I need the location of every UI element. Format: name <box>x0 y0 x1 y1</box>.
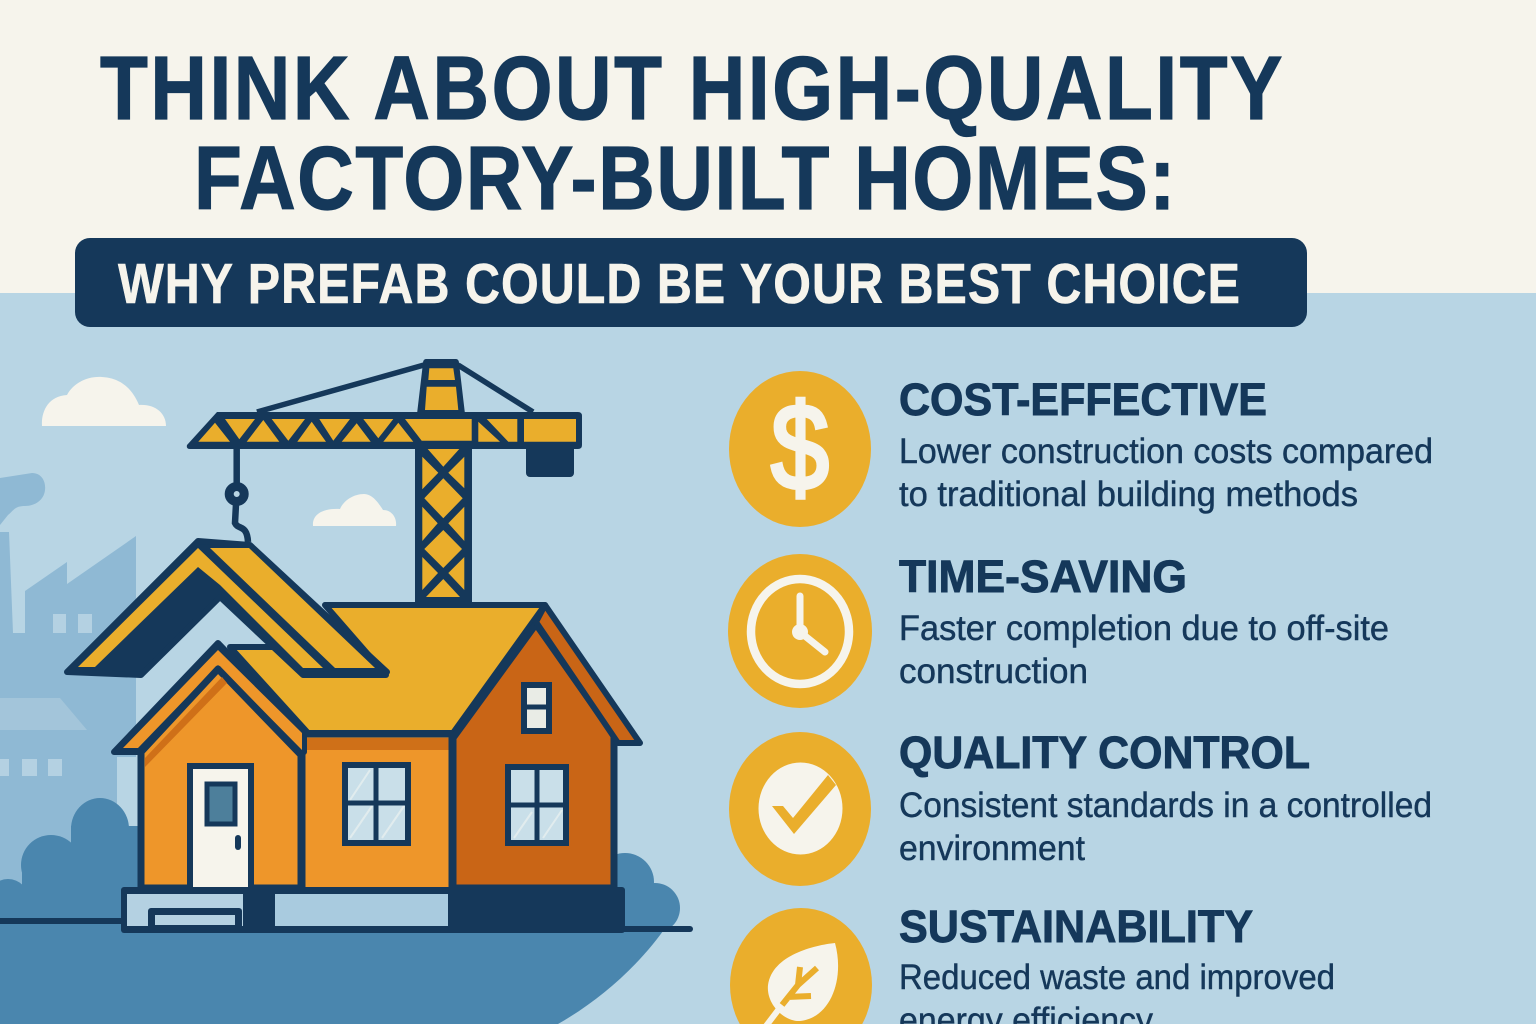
crane cables <box>257 365 533 412</box>
time-saving text: TIME-SAVING <box>899 551 1187 602</box>
crane top cap <box>417 359 465 414</box>
icon: dollar: $ <box>771 379 829 515</box>
title: THINK ABOUT HIGH-QUALITY <box>100 38 1282 138</box>
background factory silhouette <box>0 473 136 890</box>
cost-effective text: Lower construction costs compared <box>899 432 1433 471</box>
subtitle banner <box>75 238 1307 327</box>
icon: check mark <box>729 732 871 886</box>
time-saving text <box>899 551 1389 691</box>
crane jib <box>187 412 582 449</box>
window right <box>508 767 566 843</box>
crane hook <box>229 448 248 542</box>
quality control text: QUALITY CONTROL <box>899 727 1310 778</box>
benefit: quality control <box>729 727 1432 886</box>
benefit: time-saving <box>728 551 1389 708</box>
main roof <box>230 605 545 733</box>
house <box>67 541 640 933</box>
right gable roof edge <box>536 605 640 743</box>
ground <box>0 918 693 1024</box>
left gable roof <box>114 643 304 752</box>
time-saving text: Faster completion due to off-site <box>899 609 1389 648</box>
right gable wall <box>453 624 614 888</box>
quality control text <box>899 727 1432 868</box>
bushes <box>0 798 680 933</box>
middle wall <box>302 734 452 888</box>
foundation <box>121 887 625 933</box>
quality control text: environment <box>899 829 1085 868</box>
benefit: cost-effective <box>729 371 1433 527</box>
cloud left <box>42 377 166 426</box>
time-saving text: construction <box>899 652 1088 691</box>
cost-effective text: COST-EFFECTIVE <box>899 374 1267 425</box>
cost-effective text: to traditional building methods <box>899 475 1358 514</box>
crane <box>187 359 582 605</box>
icon: dollar <box>729 371 871 527</box>
sustainability text: SUSTAINABILITY <box>899 901 1253 952</box>
window middle <box>345 765 408 843</box>
crane mast <box>415 445 472 605</box>
door <box>190 766 251 890</box>
benefit: sustainability <box>730 901 1335 1024</box>
subtitle banner: WHY PREFAB COULD BE YOUR BEST CHOICE <box>118 252 1240 316</box>
cloud center <box>313 494 396 526</box>
sustainability text <box>899 901 1335 1024</box>
window upper <box>524 685 549 731</box>
counterweight <box>526 445 574 477</box>
left gable wall <box>141 669 301 888</box>
title: FACTORY-BUILT HOMES: <box>194 128 1175 228</box>
roof panel lifted by crane <box>67 541 387 675</box>
sustainability text: Reduced waste and improved <box>899 958 1335 997</box>
quality control text: Consistent standards in a controlled <box>899 786 1432 825</box>
cost-effective text <box>899 374 1433 514</box>
icon: leaf <box>730 908 872 1024</box>
title <box>100 38 1282 228</box>
icon: clock <box>728 554 872 708</box>
